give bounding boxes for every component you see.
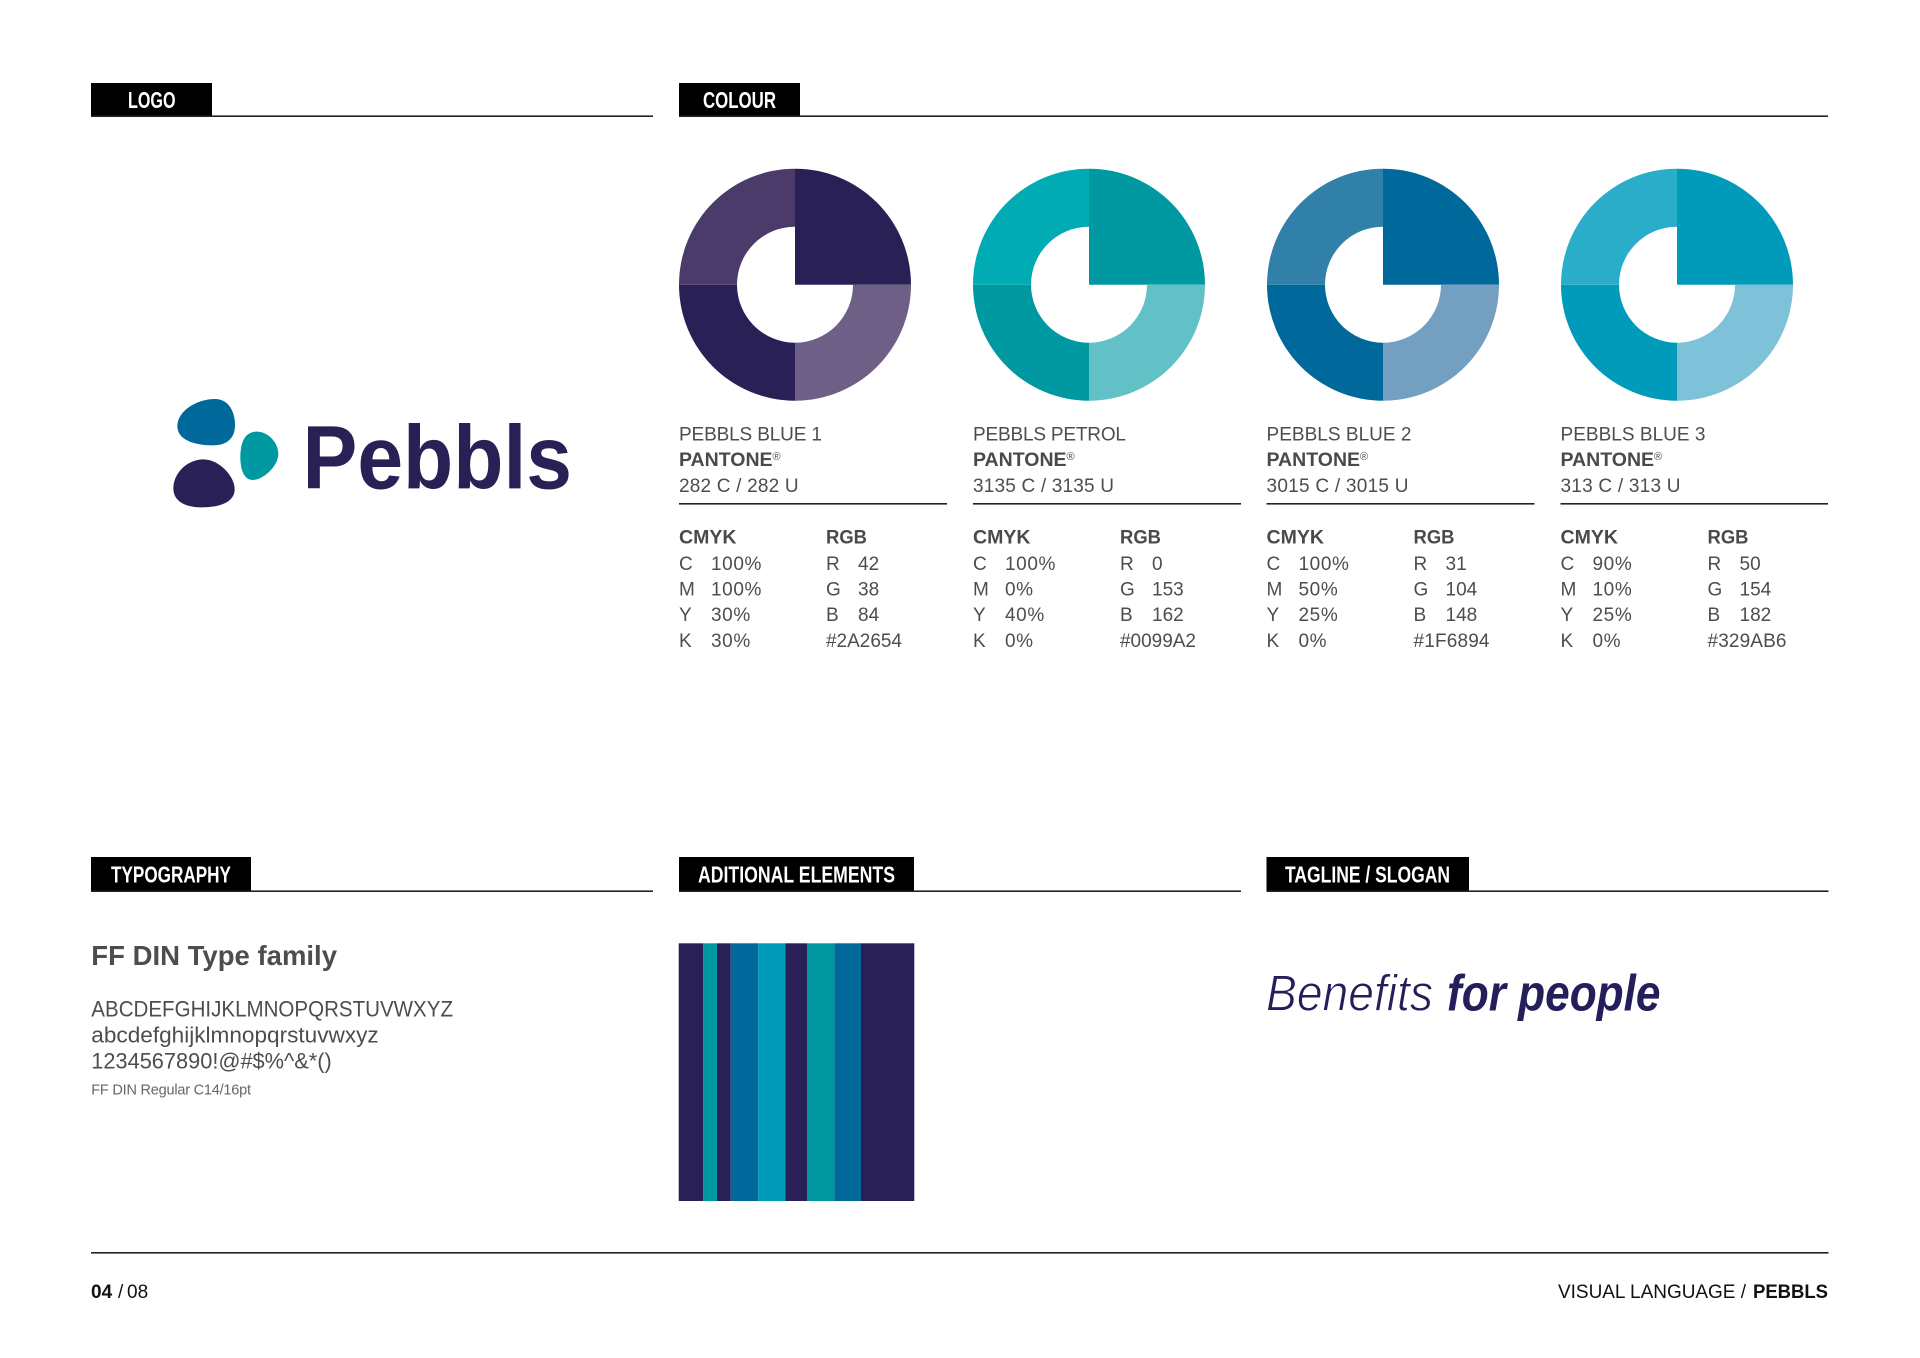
CMYK values: 100% (1298, 554, 1350, 575)
name and pantone: ® (773, 451, 781, 463)
CMYK values: K (1266, 631, 1280, 652)
CMYK values: C (973, 554, 987, 575)
logo: Pebbls pebble mark and wordmark (173, 399, 572, 508)
CMYK values: Y (679, 605, 692, 626)
CMYK values: 100% (711, 554, 762, 575)
CMYK values: 25% (1592, 605, 1632, 626)
RGB values: 153 (1152, 580, 1184, 601)
footer (91, 1252, 1828, 1303)
RGB values: 148 (1446, 605, 1477, 626)
CMYK values: K (973, 631, 986, 652)
name and pantone: PANTONE (679, 449, 773, 471)
RGB values: RGB (1414, 527, 1454, 549)
name and pantone: PANTONE (1560, 449, 1654, 471)
swatch: Pebbls Petrol (973, 169, 1241, 652)
donut: Pebbls Petrol (973, 169, 1205, 401)
panel: colour (679, 83, 1828, 652)
type specification: FF DIN Regular C14/16pt (91, 1082, 251, 1098)
RGB values: R (826, 554, 840, 575)
heading: typography: TYPOGRAPHY (111, 862, 231, 888)
type specimen: 1234567890!@#$%^&*() (91, 1048, 332, 1073)
CMYK values: 40% (1005, 605, 1045, 626)
RGB values: R (1708, 554, 1721, 575)
graphic: colour stripes (679, 943, 914, 1201)
CMYK values: 100% (1005, 554, 1056, 575)
donut: Pebbls Blue 3 (1561, 169, 1793, 401)
RGB values: B (1414, 605, 1426, 626)
CMYK values: C (1266, 554, 1280, 575)
CMYK values: 100% (711, 580, 762, 601)
slogan: Benefits (1266, 965, 1433, 1022)
RGB values: 154 (1740, 580, 1772, 601)
document name: PEBBLS (1753, 1282, 1828, 1303)
CMYK values: M (973, 580, 989, 601)
CMYK values: 25% (1298, 605, 1338, 626)
CMYK values: Y (973, 605, 986, 626)
CMYK values: 0% (1005, 580, 1034, 601)
RGB values (1708, 527, 1786, 652)
heading: colour: COLOUR (703, 87, 776, 113)
slogan (1266, 965, 1660, 1022)
RGB values: 104 (1446, 580, 1478, 601)
page number: 04 (91, 1282, 113, 1303)
RGB values: RGB (1120, 527, 1161, 549)
CMYK values: Y (1560, 605, 1574, 626)
CMYK values: Y (1266, 605, 1280, 626)
CMYK values (973, 527, 1056, 652)
RGB values (826, 527, 902, 652)
heading: logo: LOGO (128, 87, 176, 113)
RGB values: B (1708, 605, 1720, 626)
name and pantone: 313 C / 313 U (1560, 476, 1680, 497)
name and pantone: PANTONE (973, 449, 1067, 471)
donut: Pebbls Blue 2 (1267, 169, 1499, 401)
name and pantone (679, 425, 947, 505)
RGB values: #329AB6 (1708, 631, 1786, 652)
page number: 08 (127, 1282, 148, 1303)
CMYK values: M (679, 580, 695, 601)
name and pantone: 3015 C / 3015 U (1266, 476, 1408, 497)
RGB values: RGB (826, 527, 867, 549)
panel: tagline (1266, 857, 1828, 1022)
RGB values: R (1414, 554, 1427, 575)
RGB values: B (826, 605, 839, 626)
slogan: for people (1447, 965, 1660, 1022)
RGB values (1414, 527, 1490, 652)
CMYK values: CMYK (1560, 527, 1618, 549)
RGB values: 42 (858, 554, 879, 575)
wordmark: Pebbls (302, 408, 572, 508)
CMYK values: 90% (1592, 554, 1632, 575)
swatch: Pebbls Blue 2 (1266, 169, 1534, 652)
CMYK values: 0% (1592, 631, 1621, 652)
type specimen: ABCDEFGHIJKLMNOPQRSTUVWXYZ (91, 997, 453, 1022)
name and pantone (1266, 425, 1534, 505)
CMYK values: 0% (1298, 631, 1327, 652)
CMYK values (1266, 527, 1350, 652)
RGB values: 38 (858, 580, 879, 601)
RGB values: 162 (1152, 605, 1184, 626)
CMYK values: K (679, 631, 692, 652)
RGB values: #1F6894 (1414, 631, 1490, 652)
name and pantone: ® (1654, 451, 1662, 463)
name and pantone: 3135 C / 3135 U (973, 476, 1114, 497)
CMYK values: M (1266, 580, 1282, 601)
RGB values: 31 (1446, 554, 1467, 575)
CMYK values: 10% (1592, 580, 1632, 601)
RGB values: #0099A2 (1120, 631, 1196, 652)
CMYK values: 30% (711, 631, 751, 652)
name and pantone: 282 C / 282 U (679, 476, 799, 497)
CMYK values: CMYK (973, 527, 1030, 549)
name and pantone (973, 425, 1241, 505)
heading: colour (679, 83, 1828, 117)
panel: typography (91, 857, 653, 1098)
RGB values: G (1120, 580, 1135, 601)
RGB values: 50 (1740, 554, 1761, 575)
RGB values: 182 (1740, 605, 1771, 626)
panel: additional elements (679, 857, 1241, 1201)
RGB values: G (826, 580, 841, 601)
page number: / (118, 1282, 124, 1303)
name and pantone: ® (1360, 451, 1368, 463)
name and pantone: PEBBLS BLUE 3 (1560, 425, 1706, 446)
RGB values: R (1120, 554, 1134, 575)
panel: logo (91, 83, 653, 508)
CMYK values: CMYK (1266, 527, 1324, 549)
RGB values: 0 (1152, 554, 1163, 575)
CMYK values: M (1560, 580, 1576, 601)
name and pantone: PEBBLS BLUE 1 (679, 425, 822, 446)
CMYK values: C (1560, 554, 1574, 575)
CMYK values (679, 527, 762, 652)
CMYK values: 50% (1298, 580, 1338, 601)
type specimen (91, 997, 453, 1073)
name and pantone: PEBBLS PETROL (973, 425, 1126, 446)
RGB values: 84 (858, 605, 880, 626)
heading: tagline (1266, 857, 1828, 892)
swatch: Pebbls Blue 1 (679, 169, 947, 652)
name and pantone (1560, 425, 1828, 505)
donut: Pebbls Blue 1 (679, 169, 911, 401)
CMYK values (1560, 527, 1632, 652)
name and pantone: PEBBLS BLUE 2 (1266, 425, 1412, 446)
RGB values: G (1414, 580, 1428, 601)
RGB values: RGB (1708, 527, 1748, 549)
swatch: Pebbls Blue 3 (1560, 169, 1828, 652)
name and pantone: ® (1067, 451, 1075, 463)
type family name: FF DIN Type family (91, 940, 338, 971)
document title: VISUAL LANGUAGE / (1558, 1282, 1747, 1303)
RGB values: G (1708, 580, 1722, 601)
CMYK values: C (679, 554, 693, 575)
name and pantone: PANTONE (1266, 449, 1360, 471)
RGB values: #2A2654 (826, 631, 902, 652)
heading: additional elements: ADITIONAL ELEMENTS (698, 862, 895, 888)
type specimen: abcdefghijklmnopqrstuvwxyz (91, 1023, 379, 1048)
icon: three pebbles (173, 399, 278, 507)
heading: logo (91, 83, 653, 117)
CMYK values: 0% (1005, 631, 1034, 652)
CMYK values: K (1560, 631, 1574, 652)
RGB values: B (1120, 605, 1133, 626)
heading: tagline: TAGLINE / SLOGAN (1285, 862, 1450, 888)
CMYK values: CMYK (679, 527, 736, 549)
heading: additional elements (679, 857, 1241, 892)
heading: typography (91, 857, 653, 892)
RGB values (1120, 527, 1196, 652)
CMYK values: 30% (711, 605, 751, 626)
